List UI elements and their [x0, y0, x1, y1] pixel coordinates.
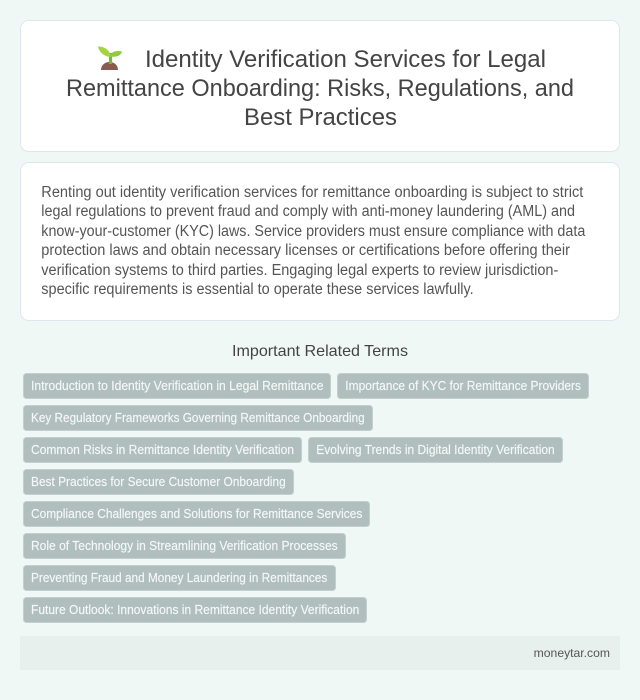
tag	[24, 566, 336, 590]
title: Remittance Onboarding: Risks, Regulations, and	[66, 75, 574, 102]
title	[66, 46, 574, 131]
tag: Future Outlook: Innovations in Remittance Identity Verification	[31, 602, 359, 617]
tag	[24, 470, 294, 494]
tag	[308, 438, 562, 462]
panel: description card	[20, 162, 620, 320]
text block: description: Renting out identity verification services for remittance onboarding is subject to strict	[41, 184, 584, 201]
tag: Evolving Trends in Digital Identity Verification	[316, 442, 555, 457]
title: Best Practices	[244, 104, 397, 131]
text block: description: protection laws and obtain necessary licenses or certifications before offering their	[41, 242, 570, 259]
text block: description: specific requirements is essential to operate these services lawfully.	[41, 281, 474, 298]
tag	[24, 502, 370, 526]
tag	[24, 598, 366, 622]
tag	[24, 406, 372, 430]
footer	[20, 636, 620, 670]
footer: moneytar.com	[534, 646, 610, 660]
tag: Role of Technology in Streamlining Verification Processes	[31, 538, 338, 553]
text block: description	[41, 184, 586, 298]
tag: Introduction to Identity Verification in Legal Remittance	[31, 378, 324, 393]
heading: related terms: Important Related Terms	[232, 343, 408, 360]
panel: title card	[20, 20, 620, 152]
tag: Importance of KYC for Remittance Providers	[345, 378, 581, 393]
tag: Common Risks in Remittance Identity Verification	[31, 442, 294, 457]
tag	[24, 438, 302, 462]
tag: Key Regulatory Frameworks Governing Remittance Onboarding	[31, 410, 365, 425]
tag: Best Practices for Secure Customer Onboarding	[31, 474, 286, 489]
text block: description: legal regulations to prevent fraud and comply with anti-money laundering (AML) and	[41, 203, 575, 220]
tag	[24, 534, 346, 558]
tag: Compliance Challenges and Solutions for Remittance Services	[31, 506, 362, 521]
text block: description: verification systems to third parties. Engaging legal experts to review jurisdiction-	[41, 262, 558, 279]
icon: sprout	[98, 46, 122, 70]
tag	[338, 374, 588, 398]
text block: description: know-your-customer (KYC) laws. Service providers must ensure compliance with data	[41, 223, 586, 240]
tag	[24, 374, 330, 398]
panel: related terms tags	[24, 374, 588, 622]
tag: Preventing Fraud and Money Laundering in Remittances	[31, 570, 327, 585]
title: Identity Verification Services for Legal	[145, 46, 546, 73]
